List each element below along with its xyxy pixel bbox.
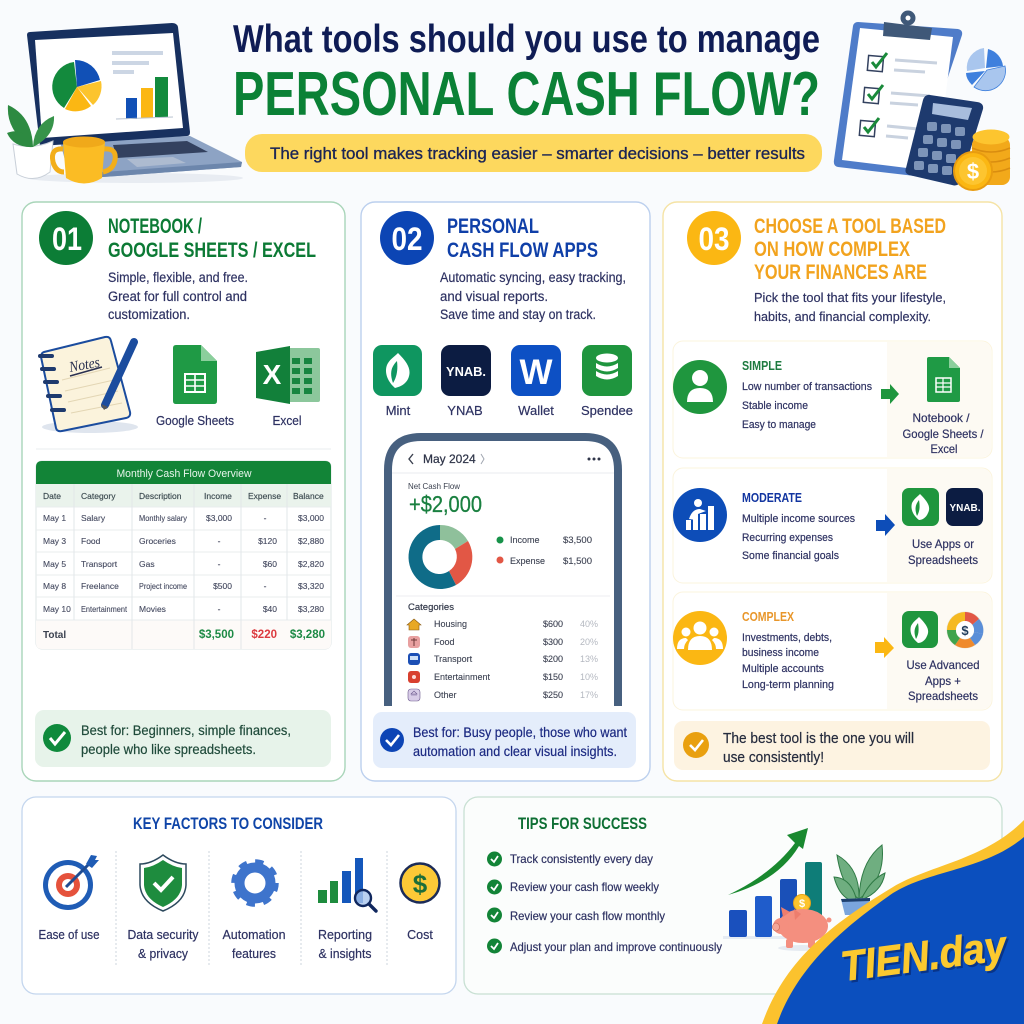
simple text: [742, 358, 872, 431]
icon: piggy bank: $: [799, 898, 805, 910]
icon: spendee app: [582, 345, 632, 396]
category list: Other: [434, 690, 457, 700]
heading: personal cash flow apps: PERSONAL: [447, 215, 539, 238]
table: monthly cash flow overview: Monthly Cash Flow Overview: [116, 468, 252, 480]
icon: spiral notebook with pen: Notes: [67, 355, 101, 376]
moderate text: Some financial goals: [742, 550, 839, 562]
phone mockup: [388, 437, 618, 706]
factor: cost: Cost: [407, 928, 433, 942]
icon: ynab: [946, 488, 983, 526]
category list: 20%: [580, 637, 598, 647]
factor: automation: [222, 862, 286, 961]
table: monthly cash flow overview: Salary: [81, 513, 106, 523]
moderate text: MODERATE: [742, 490, 802, 505]
icon: calculator: [905, 95, 983, 185]
description: and visual reports.: [440, 289, 548, 304]
category list: $250: [543, 690, 563, 700]
table: monthly cash flow overview: $3,280: [290, 629, 325, 641]
label: excel: Excel: [272, 413, 302, 428]
icon: potted plant: [7, 105, 54, 179]
panel: choose a tool by complexity: [663, 202, 1002, 781]
arrow: [876, 514, 895, 536]
category list: 13%: [580, 654, 598, 664]
factor: data security: Data security: [128, 928, 199, 942]
table: monthly cash flow overview: $120: [258, 536, 277, 546]
description: Save time and stay on track.: [440, 307, 596, 322]
recommendation: apps or spreadsheets: Spreadsheets: [908, 553, 978, 567]
factor: reporting: [318, 858, 376, 961]
complex text: Investments, debts,: [742, 632, 832, 644]
heading: personal cash flow apps: CASH FLOW APPS: [447, 239, 598, 262]
factor: cost: $: [413, 869, 428, 899]
table: monthly cash flow overview: May 1: [43, 513, 66, 523]
number badge 03: [687, 211, 741, 265]
moderate text: [742, 490, 855, 562]
number badge 02: 02: [392, 221, 422, 257]
tip list: Review your cash flow weekly: [510, 880, 659, 894]
heading: choose a tool: CHOOSE A TOOL BASED: [754, 215, 946, 238]
heading: key factors: KEY FACTORS TO CONSIDER: [133, 814, 323, 833]
category list: Transport: [434, 654, 473, 664]
icon: google sheets: [927, 357, 960, 402]
growth bar chart with arrow: [723, 828, 822, 939]
net cash flow figure: [408, 481, 482, 517]
icon: group of people: [673, 611, 727, 665]
callout: best tool: The best tool is the one you will: [723, 731, 914, 747]
category list: Food: [434, 637, 455, 647]
tip list: Review your cash flow monthly: [510, 909, 665, 923]
factor: data security: [128, 855, 199, 961]
table: monthly cash flow overview: -: [264, 513, 267, 523]
table: monthly cash flow overview: May 3: [43, 536, 66, 546]
icon: mint app: [373, 345, 422, 396]
factor: cost: [400, 864, 440, 942]
callout: best for beginners: Best for: Beginners, simple finances,: [81, 722, 291, 738]
table: monthly cash flow overview: $2,820: [298, 559, 324, 569]
icon: wallet app: [511, 345, 561, 396]
tip list: Track consistently every day: [510, 852, 653, 866]
callout: best for beginners: people who like spreadsheets.: [81, 741, 256, 757]
icon: spiral notebook with pen: [40, 337, 138, 433]
icon: google sheets: [173, 345, 217, 404]
heading: tips for success: TIPS FOR SUCCESS: [518, 814, 647, 833]
label: google sheets: Google Sheets: [156, 413, 234, 428]
phone header: [409, 452, 600, 466]
complex text: COMPLEX: [742, 609, 794, 624]
table: monthly cash flow overview: -: [218, 604, 221, 614]
table: monthly cash flow overview: Project income: [139, 581, 187, 591]
table: monthly cash flow overview: $3,320: [298, 581, 324, 591]
icon: ynab app: YNAB.: [446, 364, 486, 379]
arrow: [875, 637, 894, 658]
tip list: [487, 852, 722, 954]
icon: gold coins: $: [967, 159, 979, 184]
category list: $300: [543, 637, 563, 647]
category list: 40%: [580, 619, 598, 629]
heading: notebook / sheets / excel: [108, 215, 316, 262]
donut legend: $3,500: [563, 535, 592, 546]
donut legend: $1,500: [563, 556, 592, 567]
brand name shadow: TIEN.day: [840, 923, 1013, 992]
table: monthly cash flow overview: $3,500: [199, 629, 234, 641]
panel: key factors: [22, 797, 456, 994]
recommendation: notebook: Notebook /: [912, 411, 970, 425]
simple text: Low number of transactions: [742, 381, 872, 393]
table: monthly cash flow overview: $60: [263, 559, 277, 569]
description: Pick the tool that fits your lifestyle,: [754, 290, 946, 305]
heading: choose a tool: [754, 215, 946, 284]
table: monthly cash flow overview: $3,000: [206, 513, 232, 523]
table: monthly cash flow overview: Total: [43, 630, 66, 641]
description: [108, 270, 248, 322]
label: wallet: Wallet: [518, 403, 554, 418]
icon: ynab app: [441, 345, 491, 396]
callout: best for beginners: [35, 710, 331, 767]
factor: automation: Automation: [222, 928, 286, 942]
table: monthly cash flow overview: May 10: [43, 604, 71, 614]
title: What tools should you use to manage: [233, 18, 820, 61]
table: monthly cash flow overview: -: [218, 536, 221, 546]
moderate text: Recurring expenses: [742, 532, 833, 544]
title: PERSONAL CASH FLOW?: [233, 60, 820, 129]
factor: ease of use: Ease of use: [38, 928, 100, 942]
row: simple: [673, 341, 992, 458]
icon: blue pie chart: [966, 48, 1006, 91]
factor: reporting: & insights: [318, 947, 372, 961]
recommendation: apps or spreadsheets: [908, 537, 978, 567]
table: monthly cash flow overview: Description: [139, 491, 182, 501]
category list: $150: [543, 672, 563, 682]
label: mint: Mint: [386, 403, 411, 418]
table: monthly cash flow overview: Movies: [139, 604, 166, 614]
table: monthly cash flow overview: Balance: [293, 491, 324, 501]
table: monthly cash flow overview: Food: [81, 536, 101, 546]
category list: Housing: [434, 619, 467, 629]
recommendation: advanced apps: Apps +: [925, 674, 961, 688]
recommendation: notebook: [902, 411, 984, 456]
donut legend: Income: [510, 535, 540, 545]
table: monthly cash flow overview: -: [218, 559, 221, 569]
description: Great for full control and: [108, 289, 247, 304]
label: spendee: Spendee: [581, 403, 633, 418]
icon: wallet app: W: [519, 353, 553, 392]
table: monthly cash flow overview: Groceries: [139, 536, 176, 546]
brand corner banner: [762, 820, 1024, 1024]
icon: mint: [902, 488, 939, 526]
table: monthly cash flow overview: $3,000: [298, 513, 324, 523]
number badge 01: [39, 211, 93, 265]
recommendation: apps or spreadsheets: Use Apps or: [912, 537, 974, 551]
title: [233, 18, 820, 129]
donut chart: [409, 525, 472, 589]
complex text: Long-term planning: [742, 679, 834, 691]
brand name: TIEN.day: [838, 921, 1011, 990]
panel: personal cash flow apps: [361, 202, 650, 781]
icon: excel: [256, 346, 320, 404]
description: Automatic syncing, easy tracking,: [440, 270, 626, 285]
recommendation: notebook: Excel: [930, 442, 958, 456]
label: ynab: YNAB: [447, 403, 483, 418]
icon: laptop with charts: [27, 23, 243, 183]
recommendation: advanced apps: Use Advanced: [906, 658, 980, 672]
number badge 03: 03: [698, 221, 730, 257]
recommendation: notebook: Google Sheets /: [902, 427, 984, 441]
heading: choose a tool: ON HOW COMPLEX: [754, 238, 910, 261]
simple text: SIMPLE: [742, 358, 782, 373]
category list: $600: [543, 619, 563, 629]
icon: budget app dollar wheel: $: [961, 623, 969, 638]
table: monthly cash flow overview: May 8: [43, 581, 66, 591]
icon: piggy bank: [772, 894, 832, 951]
description: [754, 290, 946, 324]
icon: budget app dollar wheel: [946, 612, 984, 648]
table: monthly cash flow overview: Monthly salary: [139, 513, 188, 523]
subtitle pill: The right tool makes tracking easier – smarter decisions – better results: [270, 144, 805, 163]
category list: 10%: [580, 672, 598, 682]
recommendation: advanced apps: [906, 658, 980, 703]
table: monthly cash flow overview: [36, 461, 331, 649]
category list: Categories: [408, 602, 454, 613]
subtitle pill: [245, 134, 822, 172]
complex text: [742, 609, 834, 691]
panel: notebook and spreadsheets: [22, 202, 345, 781]
net cash flow figure: +$2,000: [409, 491, 482, 517]
table: monthly cash flow overview: $500: [213, 581, 232, 591]
complex text: Multiple accounts: [742, 663, 824, 675]
panel: tips for success: [464, 797, 1002, 994]
icon: plant in pot: [834, 845, 885, 915]
row: complex: [673, 592, 992, 710]
table: monthly cash flow overview: Transport: [81, 559, 118, 569]
callout: best tool: use consistently!: [723, 750, 824, 766]
table: monthly cash flow overview: -: [264, 581, 267, 591]
icon: person: [673, 360, 727, 414]
table: monthly cash flow overview: $3,280: [298, 604, 324, 614]
recommendation: advanced apps: Spreadsheets: [908, 689, 978, 703]
description: Simple, flexible, and free.: [108, 270, 248, 285]
callout: best for busy people: automation and clear visual insights.: [413, 743, 617, 759]
icon: clipboard with checklist: [834, 10, 962, 176]
table: monthly cash flow overview: $220: [251, 629, 277, 641]
category list: $200: [543, 654, 563, 664]
simple text: Easy to manage: [742, 419, 816, 431]
category list: 17%: [580, 690, 598, 700]
icon: yellow mug: [52, 136, 115, 184]
heading: personal cash flow apps: [447, 215, 598, 262]
heading: choose a tool: YOUR FINANCES ARE: [754, 261, 927, 284]
icon: gold coins: [954, 130, 1010, 190]
table: monthly cash flow overview: Category: [81, 491, 116, 501]
table: monthly cash flow overview: Gas: [139, 559, 155, 569]
description: customization.: [108, 307, 190, 322]
heading: notebook / sheets / excel: GOOGLE SHEETS / EXCEL: [108, 239, 316, 262]
factor: automation: features: [232, 947, 276, 961]
icon: mint: [902, 611, 938, 648]
table: monthly cash flow overview: Entertainment: [81, 604, 128, 614]
icon: ynab: YNAB.: [950, 503, 981, 514]
description: [440, 270, 626, 322]
table: monthly cash flow overview: Date: [43, 491, 61, 501]
table: monthly cash flow overview: Freelance: [81, 581, 119, 591]
donut legend: Expense: [510, 556, 545, 566]
factor: data security: & privacy: [138, 947, 189, 961]
moderate text: Multiple income sources: [742, 513, 855, 525]
row: moderate: [673, 468, 992, 583]
arrow: [881, 384, 899, 404]
category list: Entertainment: [434, 672, 491, 682]
icon: excel: X: [263, 359, 282, 390]
number badge 01: 01: [52, 221, 82, 257]
phone header: May 2024: [423, 452, 476, 466]
table: monthly cash flow overview: May 5: [43, 559, 66, 569]
description: habits, and financial complexity.: [754, 309, 931, 324]
factor: ease of use: [38, 855, 100, 942]
table: monthly cash flow overview: $40: [263, 604, 277, 614]
complex text: business income: [742, 647, 819, 659]
net cash flow figure: Net Cash Flow: [408, 481, 461, 491]
callout: best for busy people: [373, 712, 636, 768]
table: monthly cash flow overview: Income: [204, 491, 232, 501]
table: monthly cash flow overview: $2,880: [298, 536, 324, 546]
tip list: Adjust your plan and improve continuously: [510, 940, 722, 954]
simple text: Stable income: [742, 400, 808, 412]
heading: notebook / sheets / excel: NOTEBOOK /: [108, 215, 202, 238]
number badge 02: [380, 211, 434, 265]
callout: best for busy people: Best for: Busy people, those who want: [413, 724, 627, 740]
icon: person with bars: [673, 488, 727, 542]
factor: reporting: Reporting: [318, 928, 372, 942]
callout: best tool: [674, 721, 990, 770]
category list: [407, 602, 598, 701]
table: monthly cash flow overview: Expense: [248, 491, 281, 501]
donut legend: [496, 535, 592, 567]
